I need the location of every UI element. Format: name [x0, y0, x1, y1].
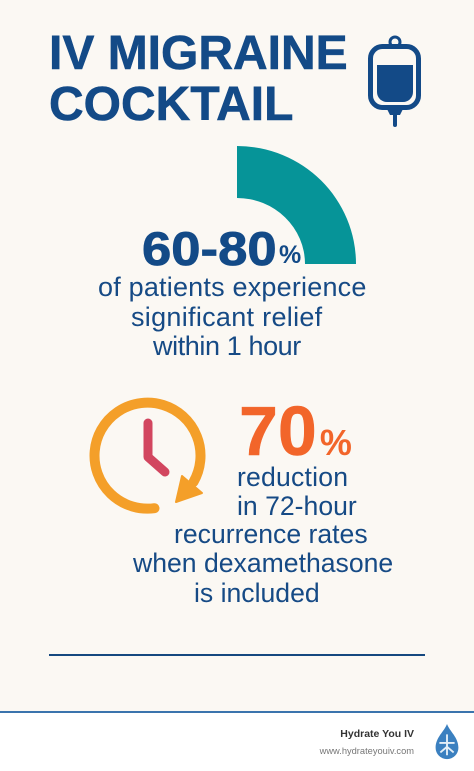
text: is included: is included: [194, 578, 320, 608]
footer url: www.hydrateyouiv.com: [320, 746, 414, 756]
icon: IV bag: [368, 36, 421, 127]
title: [49, 27, 348, 131]
text: reduction: reduction: [237, 462, 348, 492]
footer brand name: Hydrate You IV: [340, 728, 414, 740]
footer: [0, 711, 474, 771]
text: recurrence rates: recurrence rates: [174, 519, 368, 549]
stat: 70%: 70%: [239, 392, 352, 470]
text: when dexamethasone: when dexamethasone: [133, 548, 393, 578]
text: relief line 2: significant relief: [131, 302, 322, 332]
title: IV MIGRAINE: [49, 27, 348, 80]
icon: clock with circular arrow: [90, 398, 206, 514]
stat: 60-80%: %: [279, 241, 301, 269]
text: relief line 3: within 1 hour: [153, 331, 301, 361]
text: relief line 1: of patients experience: [98, 272, 367, 302]
icon: water drop logo: [436, 724, 458, 760]
chart: teal quarter ring: [237, 146, 356, 264]
text: in 72-hour: in 72-hour: [237, 491, 357, 521]
divider line: [49, 654, 425, 656]
stat: 60-80%: 60-80: [142, 222, 277, 275]
title: COCKTAIL: [49, 78, 293, 131]
